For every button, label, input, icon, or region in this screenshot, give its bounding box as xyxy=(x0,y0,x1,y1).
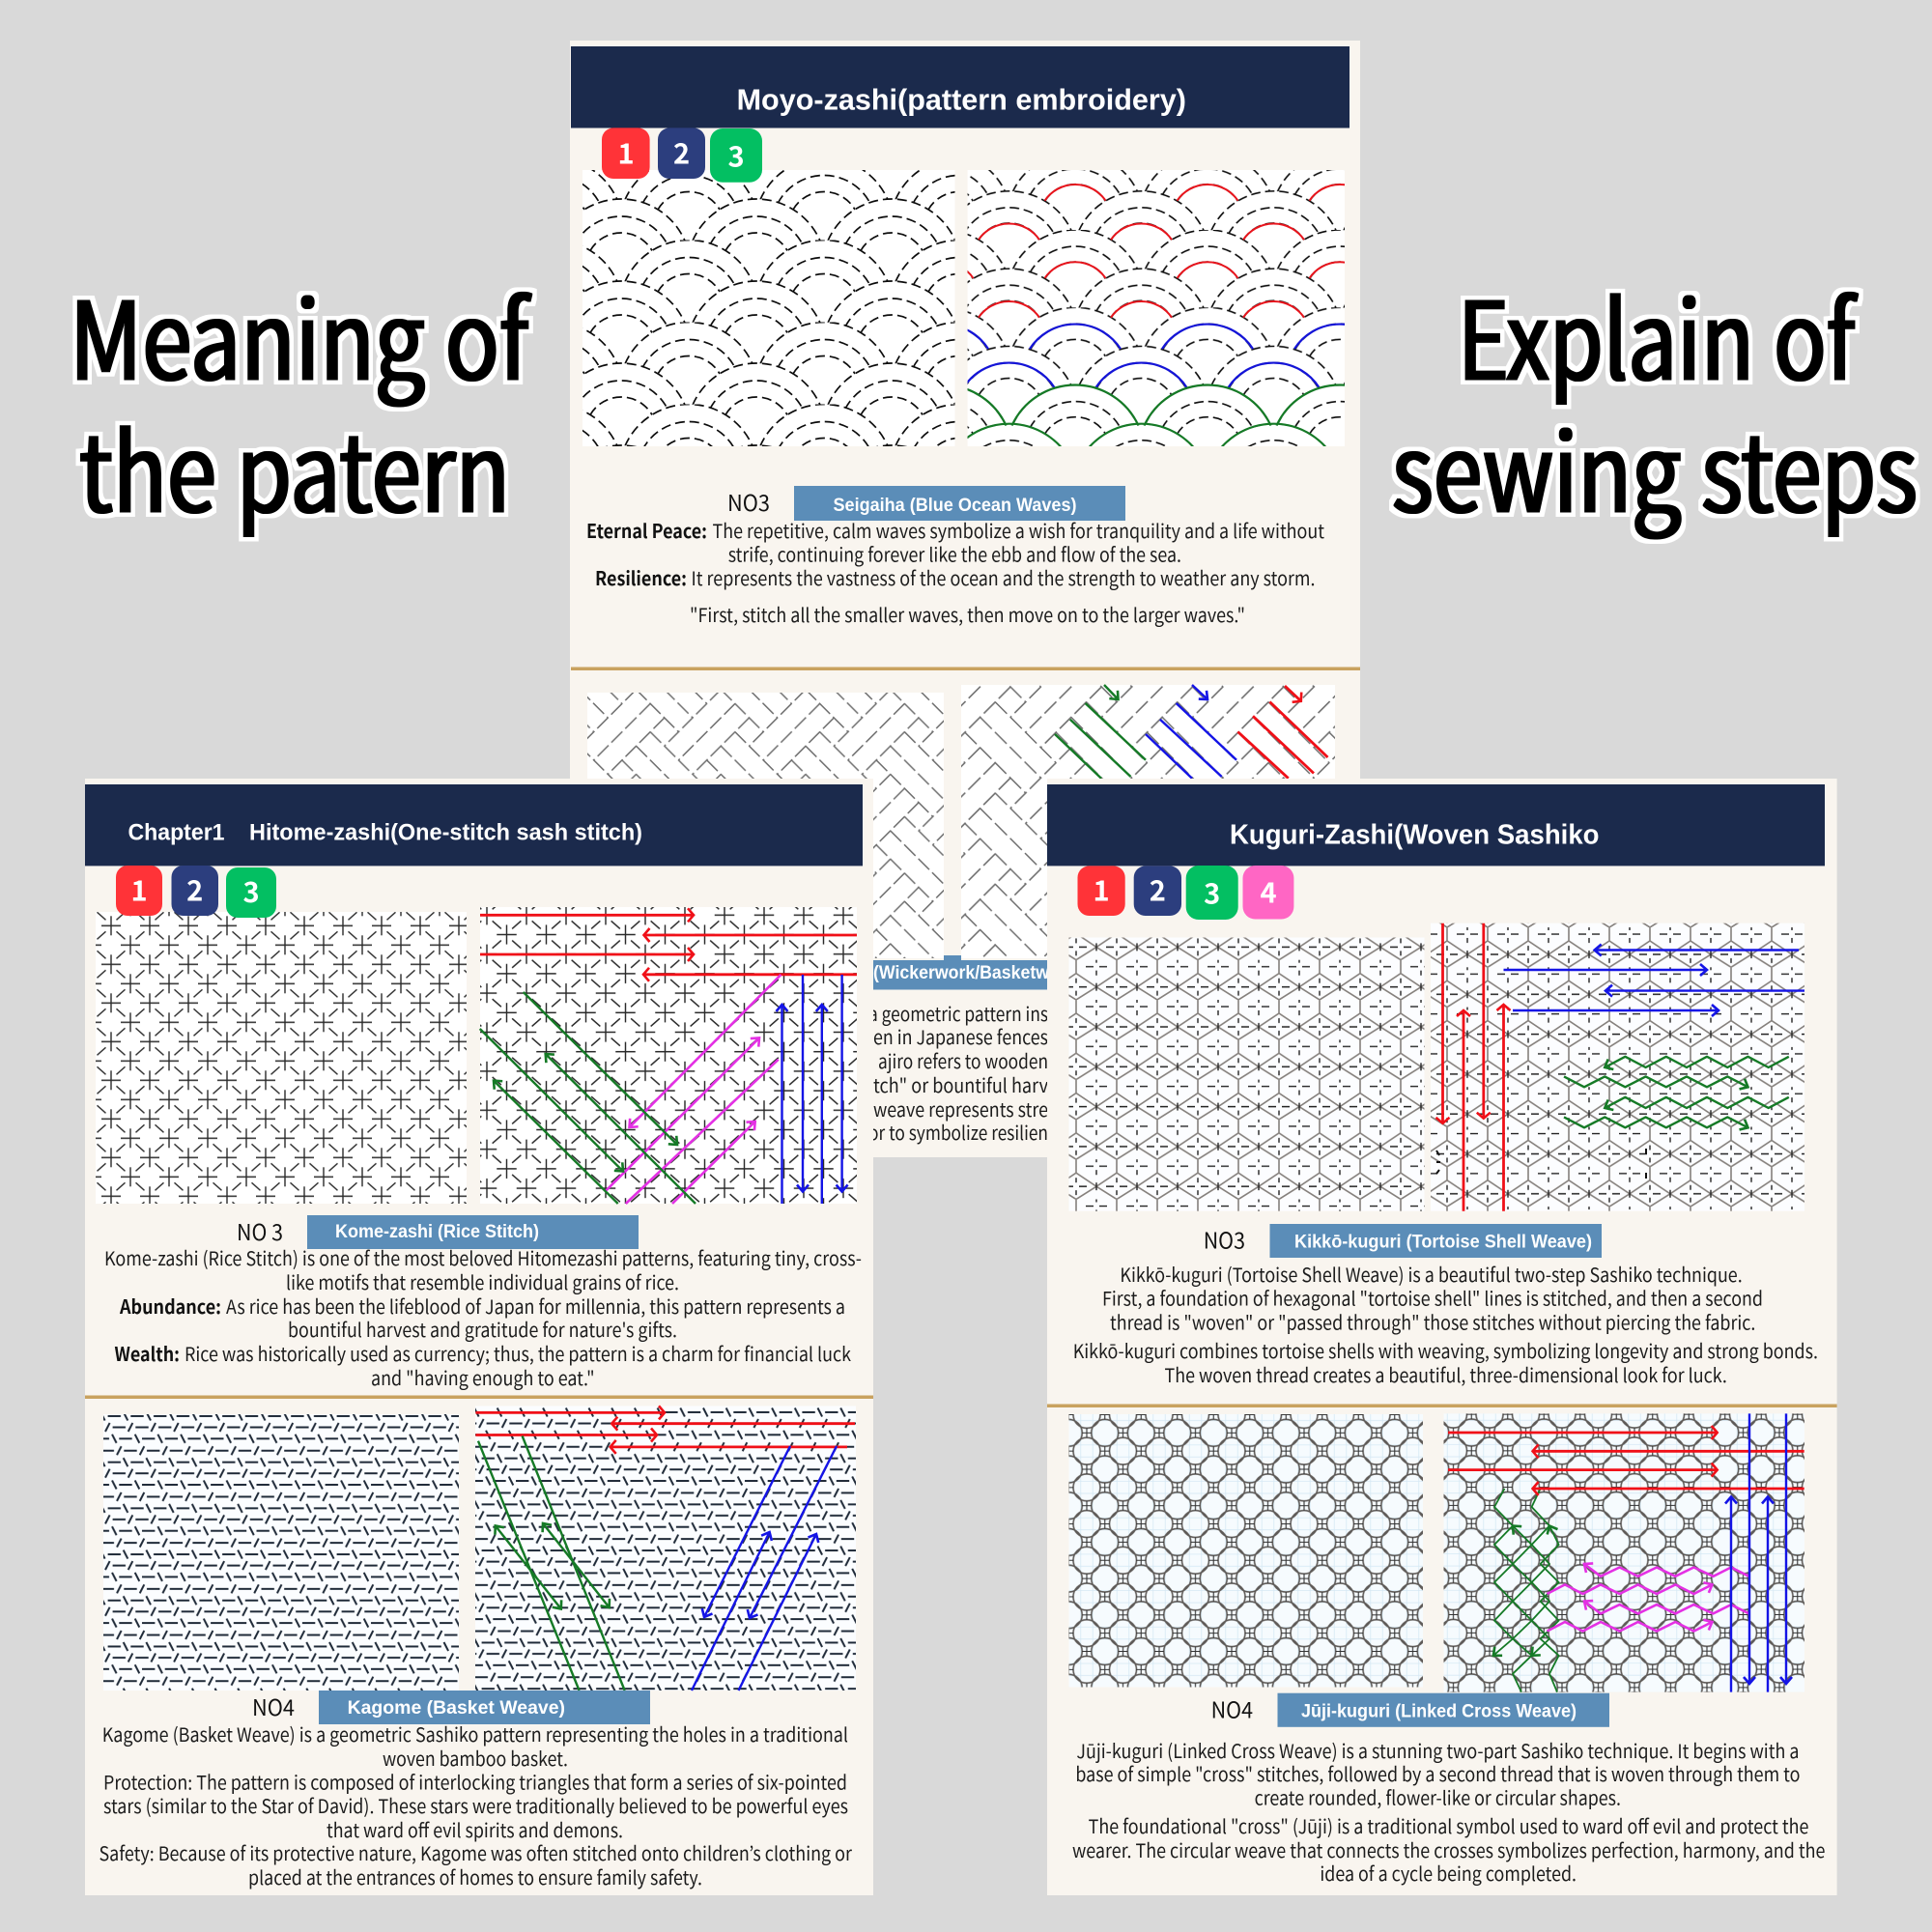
step badges 1 2 3: 2 xyxy=(673,131,690,172)
description: Kome-zashi: Wealth: xyxy=(114,1339,180,1367)
heading: Meaning of the patern: Meaning of xyxy=(70,255,531,412)
step badges 1 2 3 4 xyxy=(1078,866,1293,920)
description: Seigaiha: Resilience: xyxy=(595,563,687,591)
description: Kikko-kuguri: thread is "woven" or "passed through" those stitches without piercing the fabric. xyxy=(1110,1308,1755,1336)
description: Kagome: Kagome (Basket Weave) is a geometric Sashiko pattern representing the holes in a traditional xyxy=(102,1719,848,1747)
header bar with title xyxy=(1047,784,1825,866)
description: Ajiro (partly hidden): a geometric pattern ins xyxy=(868,999,1048,1027)
Seigaiha pattern with coloured stitch order xyxy=(968,170,1345,446)
description: Kagome: stars (similar to the Star of David). These stars were traditionally believed to be powerful eyes xyxy=(103,1791,848,1819)
header bar with chapter title: Chapter1 xyxy=(128,819,224,845)
description: Kome-zashi: Rice was historically used as currency; thus, the pattern is a charm for financial luck xyxy=(185,1339,851,1367)
panel: Hitome-zashi (left card) xyxy=(85,779,873,1895)
Kagome pattern with coloured stitch order xyxy=(475,1406,856,1690)
description: Kagome: Safety: Because of its protective nature, Kagome was often stitched onto children’s clothing or xyxy=(99,1838,852,1866)
description: Kagome: that ward off evil spirits and demons. xyxy=(327,1815,623,1843)
name bar: Kikko-kuguri xyxy=(1269,1224,1602,1258)
label NO4: NO4 xyxy=(252,1690,295,1722)
description: Juji-kuguri: wearer. The circular weave that connects the crosses symbolizes perfection, harmony, and the xyxy=(1072,1835,1825,1863)
description: Seigaiha: The repetitive, calm waves symbolize a wish for tranquility and a life without xyxy=(713,516,1324,544)
step badges 1 2 3 xyxy=(116,866,276,918)
description: Ajiro (partly hidden): ajiro refers to wooden xyxy=(878,1046,1048,1074)
Juji-kuguri pattern with coloured stitch order xyxy=(1443,1413,1804,1692)
label NO4: NO4 xyxy=(1211,1692,1253,1725)
step badges 1 2 3: 3 xyxy=(242,870,260,911)
description: Kikko-kuguri: The woven thread creates a beautiful, three-dimensional look for luck. xyxy=(1165,1360,1727,1388)
description: Seigaiha xyxy=(586,516,1324,628)
step badges 1 2 3 4: 2 xyxy=(1150,869,1166,910)
description: Ajiro (partly hidden): tch" or bountiful harv xyxy=(873,1070,1049,1098)
Kome-zashi pattern, finished xyxy=(96,912,467,1204)
name bar: Kikko-kuguri: Kikkō-kuguri (Tortoise Shell Weave) xyxy=(1294,1233,1592,1253)
description: Kome-zashi: As rice has been the lifeblood of Japan for millennia, this pattern represents a xyxy=(226,1292,845,1320)
label NO3: NO3 xyxy=(1204,1222,1245,1255)
step badges 1 2 3 4: 4 xyxy=(1260,871,1277,912)
Kagome pattern, finished xyxy=(103,1414,459,1690)
card background xyxy=(85,779,873,1895)
step badges 1 2 3 xyxy=(602,128,762,183)
Seigaiha pattern, finished xyxy=(582,170,954,446)
name bar: Kagome xyxy=(319,1690,650,1724)
step badges 1 2 3 4: 1 xyxy=(1093,869,1110,910)
description: Seigaiha: It represents the vastness of the ocean and the strength to weather any storm. xyxy=(692,563,1316,591)
step badges 1 2 3: 2 xyxy=(186,869,203,910)
step badges 1 2 3: 1 xyxy=(617,131,635,172)
description: Kome-zashi: like motifs that resemble individual grains of rice. xyxy=(286,1267,679,1295)
Juji-kuguri pattern, finished xyxy=(1068,1414,1423,1687)
description: Kagome xyxy=(99,1719,852,1890)
description: Kikko-kuguri: First, a foundation of hexagonal "tortoise shell" lines is stitched, and then a second xyxy=(1102,1284,1763,1312)
Kikko-kuguri pattern, finished xyxy=(1068,937,1424,1211)
description: Seigaiha: strife, continuing forever like the ebb and flow of the sea. xyxy=(728,539,1181,568)
description: Juji-kuguri: create rounded, flower-like or circular shapes. xyxy=(1255,1783,1621,1811)
Ajiro pattern with coloured stitch order xyxy=(961,685,1335,958)
description: Juji-kuguri xyxy=(1072,1736,1825,1887)
description: Seigaiha: "First, stitch all the smaller waves, then move on to the larger waves." xyxy=(690,600,1245,628)
name bar: Kome-zashi: Kome-zashi (Rice Stitch) xyxy=(335,1222,539,1242)
description: Kagome: woven bamboo basket. xyxy=(383,1744,568,1772)
header bar with title: Kuguri-Zashi(Woven Sashiko xyxy=(1230,820,1600,851)
step badges 1 2 3 4: 3 xyxy=(1204,871,1220,912)
description: Juji-kuguri: base of simple "cross" stitches, followed by a second thread that is woven through them to xyxy=(1075,1759,1801,1787)
name bar: Seigaiha xyxy=(794,486,1125,521)
header bar with title: Moyo-zashi(pattern embroidery) xyxy=(737,83,1186,117)
Ajiro pattern, finished xyxy=(587,693,944,958)
description: Kome-zashi: and "having enough to eat." xyxy=(371,1363,595,1391)
name bar: Kagome: Kagome (Basket Weave) xyxy=(348,1698,565,1719)
header bar with chapter title: Hitome-zashi(One-stitch sash stitch) xyxy=(249,819,642,845)
panel: Moyo-zashi (top card) xyxy=(570,41,1403,1157)
name bar: Juji-kuguri xyxy=(1277,1693,1609,1727)
description: Kome-zashi: Kome-zashi (Rice Stitch) is one of the most beloved Hitomezashi patterns, featuring tiny, cross- xyxy=(104,1243,862,1271)
header bar with chapter title xyxy=(85,784,863,866)
header bar with title xyxy=(571,46,1350,128)
heading: Meaning of the patern xyxy=(70,255,531,544)
name bar: Wickerwork: (Wickerwork/Basketw xyxy=(873,963,1049,983)
name bar: Seigaiha: Seigaiha (Blue Ocean Waves) xyxy=(833,496,1076,516)
description: Kagome: Protection: The pattern is composed of interlocking triangles that form a series of six-pointed xyxy=(103,1768,847,1795)
description: Kome-zashi xyxy=(104,1243,862,1391)
description: Juji-kuguri: The foundational "cross" (Jūji) is a traditional symbol used to ward off evil and protect the xyxy=(1089,1811,1808,1839)
description: Seigaiha: Eternal Peace: xyxy=(586,516,707,544)
description: Kikko-kuguri xyxy=(1073,1260,1818,1388)
heading: Explain of sewing steps xyxy=(1392,255,1918,544)
Kome-zashi pattern with coloured stitch order xyxy=(480,907,857,1204)
name bar: Juji-kuguri: Jūji-kuguri (Linked Cross Weave) xyxy=(1301,1702,1577,1721)
card background xyxy=(1047,779,1837,1895)
Kikko-kuguri pattern with coloured stitch order xyxy=(1431,923,1804,1211)
heading: Meaning of the patern: the patern xyxy=(79,387,510,544)
card background xyxy=(570,41,1360,1157)
description: Ajiro (partly hidden) xyxy=(868,999,1049,1146)
description: Kome-zashi: Abundance: xyxy=(119,1292,221,1320)
description: Ajiro (partly hidden): en in Japanese fences xyxy=(873,1022,1048,1050)
description: Ajiro (partly hidden): weave represents stre xyxy=(873,1094,1048,1122)
step badges 1 2 3: 1 xyxy=(130,869,148,910)
panel: Kuguri-Zashi (right card) xyxy=(1047,779,1837,1895)
description: Kikko-kuguri: Kikkō-kuguri combines tortoise shells with weaving, symbolizing longevity and strong bonds. xyxy=(1073,1336,1818,1364)
name bar: Kome-zashi xyxy=(307,1215,639,1249)
description: Kikko-kuguri: Kikkō-kuguri (Tortoise Shell Weave) is a beautiful two-step Sashiko technique. xyxy=(1120,1260,1743,1288)
description: Juji-kuguri: Jūji-kuguri (Linked Cross Weave) is a stunning two-part Sashiko technique. It begins with a xyxy=(1076,1736,1799,1764)
description: Juji-kuguri: idea of a cycle being completed. xyxy=(1320,1859,1577,1887)
label NO3: NO3 xyxy=(727,485,770,518)
description: Kagome: placed at the entrances of homes to ensure family safety. xyxy=(248,1862,702,1890)
description: Ajiro (partly hidden): or to symbolize resilien xyxy=(868,1118,1048,1146)
name bar: Wickerwork xyxy=(869,955,1053,989)
description: Kome-zashi: bountiful harvest and gratitude for nature's gifts. xyxy=(288,1315,677,1343)
label NO 3: NO 3 xyxy=(237,1214,283,1247)
step badges 1 2 3: 3 xyxy=(727,135,745,176)
